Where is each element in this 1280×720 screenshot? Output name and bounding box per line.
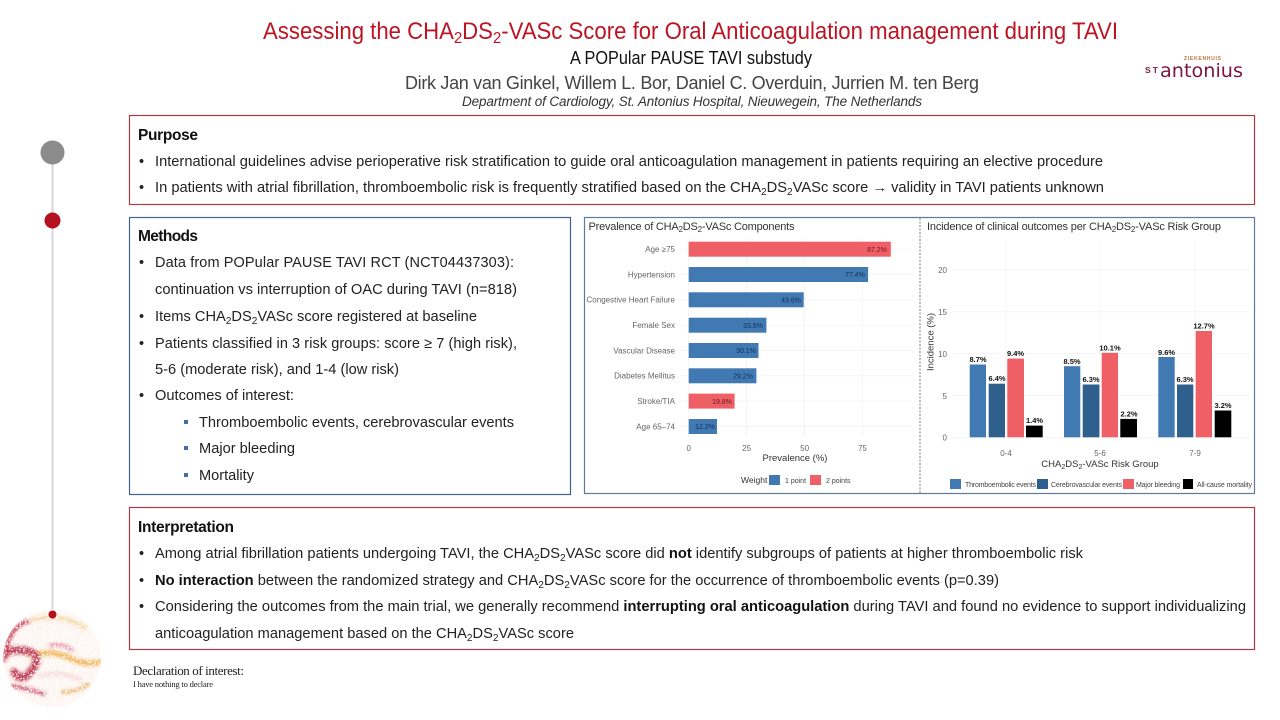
x axis ticks: 25 (742, 444, 752, 453)
text: methods list: Patients classified in 3 risk groups: score ≥ 7 (high risk), (155, 336, 517, 352)
legend: outcomes: Major bleeding (1136, 482, 1180, 489)
text: interpretation bullet 3: DS (473, 626, 493, 642)
text: methods list (139, 255, 517, 484)
text: methods list: Items CHA (155, 309, 225, 325)
text: interpretation bullet 1: • (139, 546, 144, 562)
chart title: 2 (1131, 225, 1136, 234)
text: purpose bullet 2: 2 (787, 187, 793, 198)
declaration of interest: I have nothing to declare (133, 679, 213, 689)
x axis title: CHA (1041, 459, 1061, 470)
text: interpretation bullet 3: Considering the outcomes from the main trial, we generally recommend interrupting oral anticoagulation during TAVI and found no evidence to support individualizing (155, 599, 1246, 615)
x axis title: 2 (1061, 464, 1065, 471)
bars (689, 242, 891, 434)
group 5-6 bars: 2.2% (1120, 410, 1138, 418)
text: interpretation bullet 2: • (139, 573, 144, 589)
logo: St Antonius: antonius (1160, 60, 1243, 82)
text: methods list: continuation vs interruption of OAC during TAVI (n=818) (155, 282, 517, 298)
chart title: 2 (698, 225, 703, 234)
group 5-6 bars: 8.5% (1063, 357, 1081, 366)
affiliation: Department of Cardiology, St. Antonius Hospital, Nieuwegein, The Netherlands (462, 94, 922, 109)
text: methods list: Thromboembolic events, cerebrovascular events (199, 415, 514, 431)
category labels: Diabetes Mellitus (614, 372, 675, 381)
group 7-9 bars: 3.2% (1214, 401, 1232, 410)
text: interpretation bullet 2: No interaction between the randomized strategy and CHA (155, 573, 535, 589)
timeline: vertical line and markers (40, 140, 64, 616)
text: methods list: Major bleeding (199, 441, 295, 457)
bar values: 29.2% (733, 374, 753, 380)
text: methods list: 2 (226, 316, 232, 327)
y axis title: Incidence (%) (926, 313, 936, 371)
y axis ticks: 5 (943, 392, 948, 401)
group 7-9 bars: 9.6% (1158, 348, 1175, 357)
legend: weight: Weight (741, 475, 768, 485)
panel: purpose (130, 116, 1254, 204)
title: 2 (454, 30, 462, 47)
chart title: Prevalence of CHA (588, 221, 679, 233)
text: interpretation bullet 3: 2 (493, 633, 499, 644)
text: methods list: Mortality (199, 468, 255, 484)
text: methods list: 2 (252, 316, 258, 327)
text: interpretation bullet 1: 2 (534, 553, 540, 564)
group 0-4 bars: 1.4% (1026, 416, 1043, 425)
group 7-9 bars: 6.3% (1176, 375, 1194, 384)
x axis title: Prevalence (%) (763, 453, 827, 464)
panel: interpretation (130, 508, 1254, 650)
text: interpretation bullet 2: 2 (538, 580, 544, 591)
text: purpose bullet 1: • (139, 154, 144, 170)
text: interpretation bullet 1: VASc score did (566, 546, 669, 562)
y axis ticks: 20 (938, 266, 948, 275)
text: interpretation bullet 1: Among atrial fibrillation patients undergoing TAVI, the CHA (155, 546, 530, 562)
x axis ticks (1000, 449, 1201, 458)
group 5-6 bars (1063, 344, 1138, 437)
x axis ticks: 0-4 (1000, 449, 1012, 458)
legend: outcomes: All-cause mortality (1197, 482, 1252, 489)
bar values: 30.1% (736, 348, 756, 355)
chart title: -VASc Risk Group (1135, 221, 1221, 233)
text: interpretation bullet 2: DS (544, 573, 564, 589)
text: interpretation bullet 1: not identify subgroups of patients at higher thromboembolic risk (669, 546, 1079, 562)
text: methods list: 5-6 (moderate risk), and 1-4 (low risk) (155, 362, 399, 378)
chart title: DS (1116, 221, 1131, 233)
bar values: 12.2% (695, 424, 715, 431)
title: Assessing the CHA (263, 18, 470, 45)
group 0-4 bars: 9.4% (1007, 349, 1024, 358)
chart title: -VASc Components (702, 221, 795, 233)
text: interpretation bullet 1 (139, 546, 1084, 564)
legend: outcomes: Cerebrovascular events (1051, 482, 1122, 489)
declaration of interest (133, 663, 244, 689)
group 7-9 bars (1158, 322, 1232, 437)
bar values: 19.8% (712, 399, 732, 406)
y axis ticks: 10 (938, 350, 948, 359)
bar values (695, 247, 887, 431)
x axis title: -VASc Risk Group (1082, 459, 1159, 470)
text: interpretation bullet 2 (139, 573, 999, 591)
text: methods list: DS (231, 309, 252, 325)
category labels (587, 245, 676, 431)
heading: methods: Methods (138, 228, 198, 245)
text: methods list: • (139, 388, 144, 404)
bar values: 77.4% (845, 272, 865, 279)
x axis ticks: 5-6 (1094, 449, 1106, 458)
group 5-6 bars: 10.1% (1099, 344, 1121, 352)
text: purpose bullet 2: In patients with atrial fibrillation, thromboembolic risk is frequently stratified based on the CHA (155, 180, 754, 196)
x axis title: 2 (1078, 464, 1082, 471)
chart: prevalence of components (587, 221, 912, 485)
text: interpretation bullet 2: VASc score for the occurrence of thromboembolic events (p=0.39) (570, 573, 999, 589)
text: interpretation bullet 1: 2 (560, 553, 566, 564)
x axis title: DS (1065, 459, 1078, 470)
text: methods list: • (139, 309, 144, 325)
authors: Dirk Jan van Ginkel, Willem L. Bor, Daniel C. Overduin, Jurrien M. ten Berg (405, 73, 979, 93)
text: purpose bullet 2: VASc score → validity in TAVI patients unknown (793, 180, 1104, 196)
category labels: Female Sex (632, 321, 675, 330)
category labels: Stroke/TIA (637, 397, 676, 406)
text: interpretation bullet 3: anticoagulation management based on the CHA (155, 626, 464, 642)
y axis ticks: 15 (938, 308, 948, 317)
legend: weight: 1 point (785, 478, 806, 485)
category labels: Age 65–74 (636, 422, 676, 431)
heading: interpretation: Interpretation (138, 519, 234, 536)
logo: St Antonius: ST (1145, 65, 1159, 75)
title: -VASc Score for Oral Anticoagulation management during TAVI (501, 18, 1118, 45)
chart: incidence of clinical outcomes (926, 221, 1252, 489)
panel: charts frame (584, 218, 1254, 494)
group 7-9 bars: 12.7% (1193, 322, 1215, 330)
legend: outcomes (950, 479, 1252, 489)
marker: grey circle (40, 140, 64, 164)
y axis ticks (938, 266, 948, 442)
text: interpretation bullet 3: • (139, 599, 144, 615)
text: purpose bullet 2: DS (767, 180, 787, 196)
category labels: Vascular Disease (613, 346, 676, 355)
category labels: Congestive Heart Failure (587, 296, 676, 305)
text: purpose bullet 2 (139, 180, 1104, 198)
chart title: Incidence of clinical outcomes per CHA (927, 221, 1112, 233)
heading: purpose: Purpose (138, 127, 198, 144)
text: interpretation bullet 3 (139, 599, 1246, 644)
group 0-4 bars (969, 349, 1043, 437)
x axis ticks: 0 (686, 444, 691, 453)
text: interpretation bullet 3: VASc score (499, 626, 574, 642)
chart title: 2 (1112, 225, 1117, 234)
y axis ticks: 0 (943, 434, 948, 442)
text: methods list: Data from POPular PAUSE TAVI RCT (NCT04437303): (155, 255, 514, 271)
bar values: 33.5% (743, 323, 763, 330)
marker: red dot at globe (48, 610, 56, 618)
text: interpretation bullet 3: 2 (467, 633, 473, 644)
decorative globe illustration (3, 609, 102, 707)
text: purpose bullet 2: • (139, 180, 144, 196)
group 0-4 bars: 6.4% (988, 374, 1006, 383)
chart title: DS (683, 221, 698, 233)
category labels: Hypertension (628, 270, 675, 279)
group 5-6 bars: 6.3% (1082, 375, 1100, 384)
text: methods list: • (139, 336, 144, 352)
legend: weight: 2 points (826, 478, 851, 485)
text: purpose bullet 2: 2 (761, 187, 767, 198)
bar values: 87.2% (867, 247, 887, 254)
x axis ticks: 50 (800, 444, 810, 453)
group 0-4 bars: 8.7% (969, 355, 987, 364)
text: interpretation bullet 1: DS (540, 546, 560, 562)
x axis ticks: 75 (858, 444, 867, 453)
category labels: Age ≥75 (645, 245, 676, 254)
x axis ticks (686, 444, 867, 453)
legend: outcomes: Thromboembolic events (965, 482, 1036, 489)
text: methods list: Outcomes of interest: (155, 388, 294, 404)
text: methods list: • (139, 255, 144, 271)
text: purpose bullet 1: International guidelines advise perioperative risk stratification to guide oral anticoagulation management in patients requiring an elective procedure (155, 154, 1103, 170)
text: methods list: VASc score registered at baseline (257, 309, 477, 325)
bar values: 49.6% (781, 298, 801, 304)
title: DS (462, 18, 493, 45)
chart title: 2 (678, 225, 683, 234)
panel: methods (130, 218, 570, 494)
text: interpretation bullet 2: 2 (564, 580, 570, 591)
legend: weight (741, 475, 851, 485)
x axis ticks: 7-9 (1189, 449, 1201, 458)
logo: St Antonius: ZIEKENHUIS (1184, 56, 1222, 62)
subtitle: A POPular PAUSE TAVI substudy (570, 48, 812, 68)
title: 2 (493, 30, 501, 47)
declaration of interest: Declaration of interest: (133, 663, 244, 678)
